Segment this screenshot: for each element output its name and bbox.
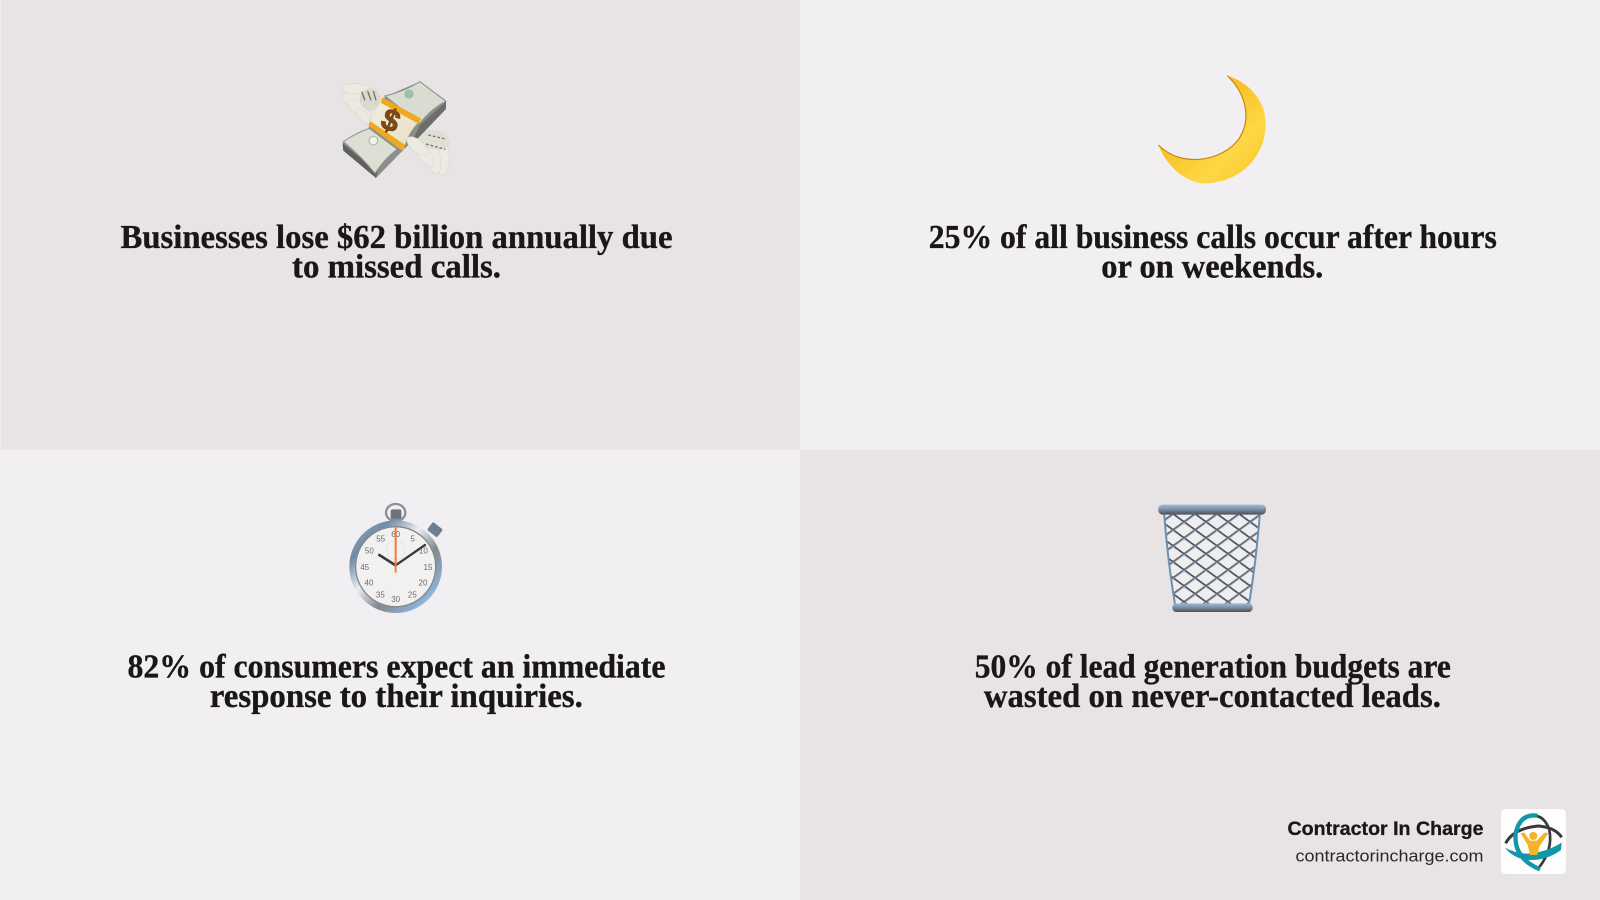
heading: after-hours statistic: 25% of all business calls occur after hours [929, 219, 1497, 256]
icon: stopwatch: 45 [360, 563, 370, 572]
icon: stopwatch: 25 [408, 590, 417, 599]
heading: consumer expectations statistic [128, 648, 666, 715]
icon: stopwatch: 30 [391, 595, 401, 604]
icon: stopwatch: 55 [376, 535, 386, 544]
panel: lost revenue [0, 0, 800, 450]
heading: wasted budgets statistic: 50% of lead generation budgets are [975, 648, 1451, 686]
brand name: Contractor In Charge [1288, 819, 1484, 840]
icon: stopwatch: 20 [419, 578, 428, 587]
brand website: contractorincharge.com [1296, 846, 1484, 866]
heading: after-hours statistic: or on weekends. [1101, 248, 1323, 286]
heading: lost revenue statistic: Businesses lose $62 billion annually due [120, 219, 672, 256]
icon: stopwatch: 35 [376, 590, 385, 599]
icon: wire wastebasket [1158, 505, 1266, 612]
heading: lost revenue statistic [120, 219, 672, 286]
icon: stopwatch [349, 504, 443, 613]
icon: money with wings: $ [376, 102, 405, 140]
icon: stopwatch: 15 [424, 563, 433, 572]
heading: wasted budgets statistic [975, 648, 1451, 715]
icon: money with wings [340, 82, 451, 178]
icon: stopwatch: 10 [419, 547, 428, 556]
icon: stopwatch: 5 [410, 535, 415, 544]
heading: consumer expectations statistic: response to their inquiries. [210, 678, 583, 715]
heading: wasted budgets statistic: wasted on never-contacted leads. [984, 678, 1441, 715]
icon: stopwatch: 40 [365, 579, 374, 588]
icon: stopwatch: 60 [391, 530, 401, 539]
icon: stopwatch: 50 [365, 547, 374, 556]
icon: crescent moon [1158, 76, 1266, 183]
heading: after-hours statistic [929, 219, 1497, 286]
panel: consumer expectations [0, 450, 800, 900]
heading: lost revenue statistic: to missed calls. [292, 248, 501, 286]
heading: consumer expectations statistic: 82% of consumers expect an immediate [128, 648, 666, 686]
panel: after-hours calls [800, 0, 1600, 450]
logo [1501, 809, 1566, 874]
panel: wasted budgets [800, 450, 1600, 900]
